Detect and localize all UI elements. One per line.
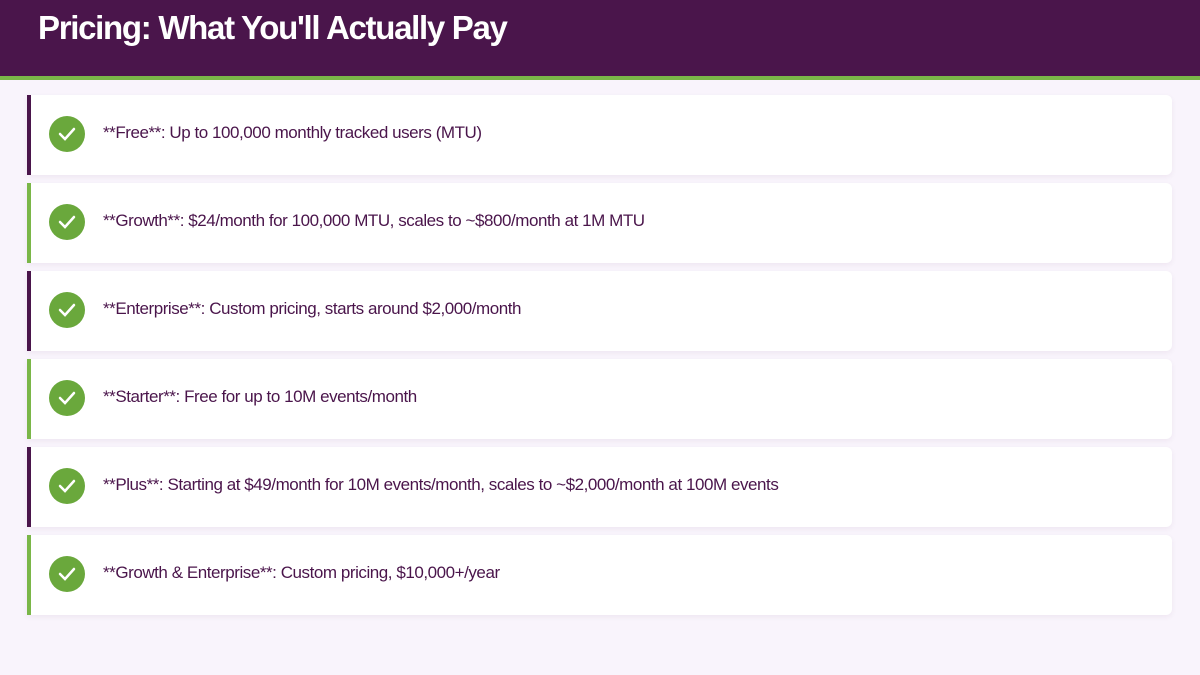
icon: check bbox=[49, 116, 85, 152]
card: growth & enterprise bbox=[27, 535, 1172, 615]
icon: check bbox=[49, 468, 85, 504]
icon: check bbox=[49, 556, 85, 592]
card: starter bbox=[27, 359, 1172, 439]
text: **Enterprise**: Custom pricing, starts around $2,000/month bbox=[103, 299, 521, 318]
icon: check bbox=[49, 292, 85, 328]
text: **Growth & Enterprise**: Custom pricing, $10,000+/year bbox=[103, 563, 500, 582]
title: Pricing: What You'll Actually Pay bbox=[38, 9, 507, 46]
text: **Free**: Up to 100,000 monthly tracked users (MTU) bbox=[103, 123, 482, 142]
text: **Starter**: Free for up to 10M events/month bbox=[103, 387, 417, 406]
text: **Growth**: $24/month for 100,000 MTU, scales to ~$800/month at 1M MTU bbox=[103, 211, 645, 230]
card: free bbox=[27, 95, 1172, 175]
text: **Plus**: Starting at $49/month for 10M events/month, scales to ~$2,000/month at 100M events bbox=[103, 475, 778, 494]
header bbox=[0, 0, 1200, 80]
card: growth bbox=[27, 183, 1172, 263]
card: enterprise bbox=[27, 271, 1172, 351]
icon: check bbox=[49, 204, 85, 240]
icon: check bbox=[49, 380, 85, 416]
card: plus bbox=[27, 447, 1172, 527]
